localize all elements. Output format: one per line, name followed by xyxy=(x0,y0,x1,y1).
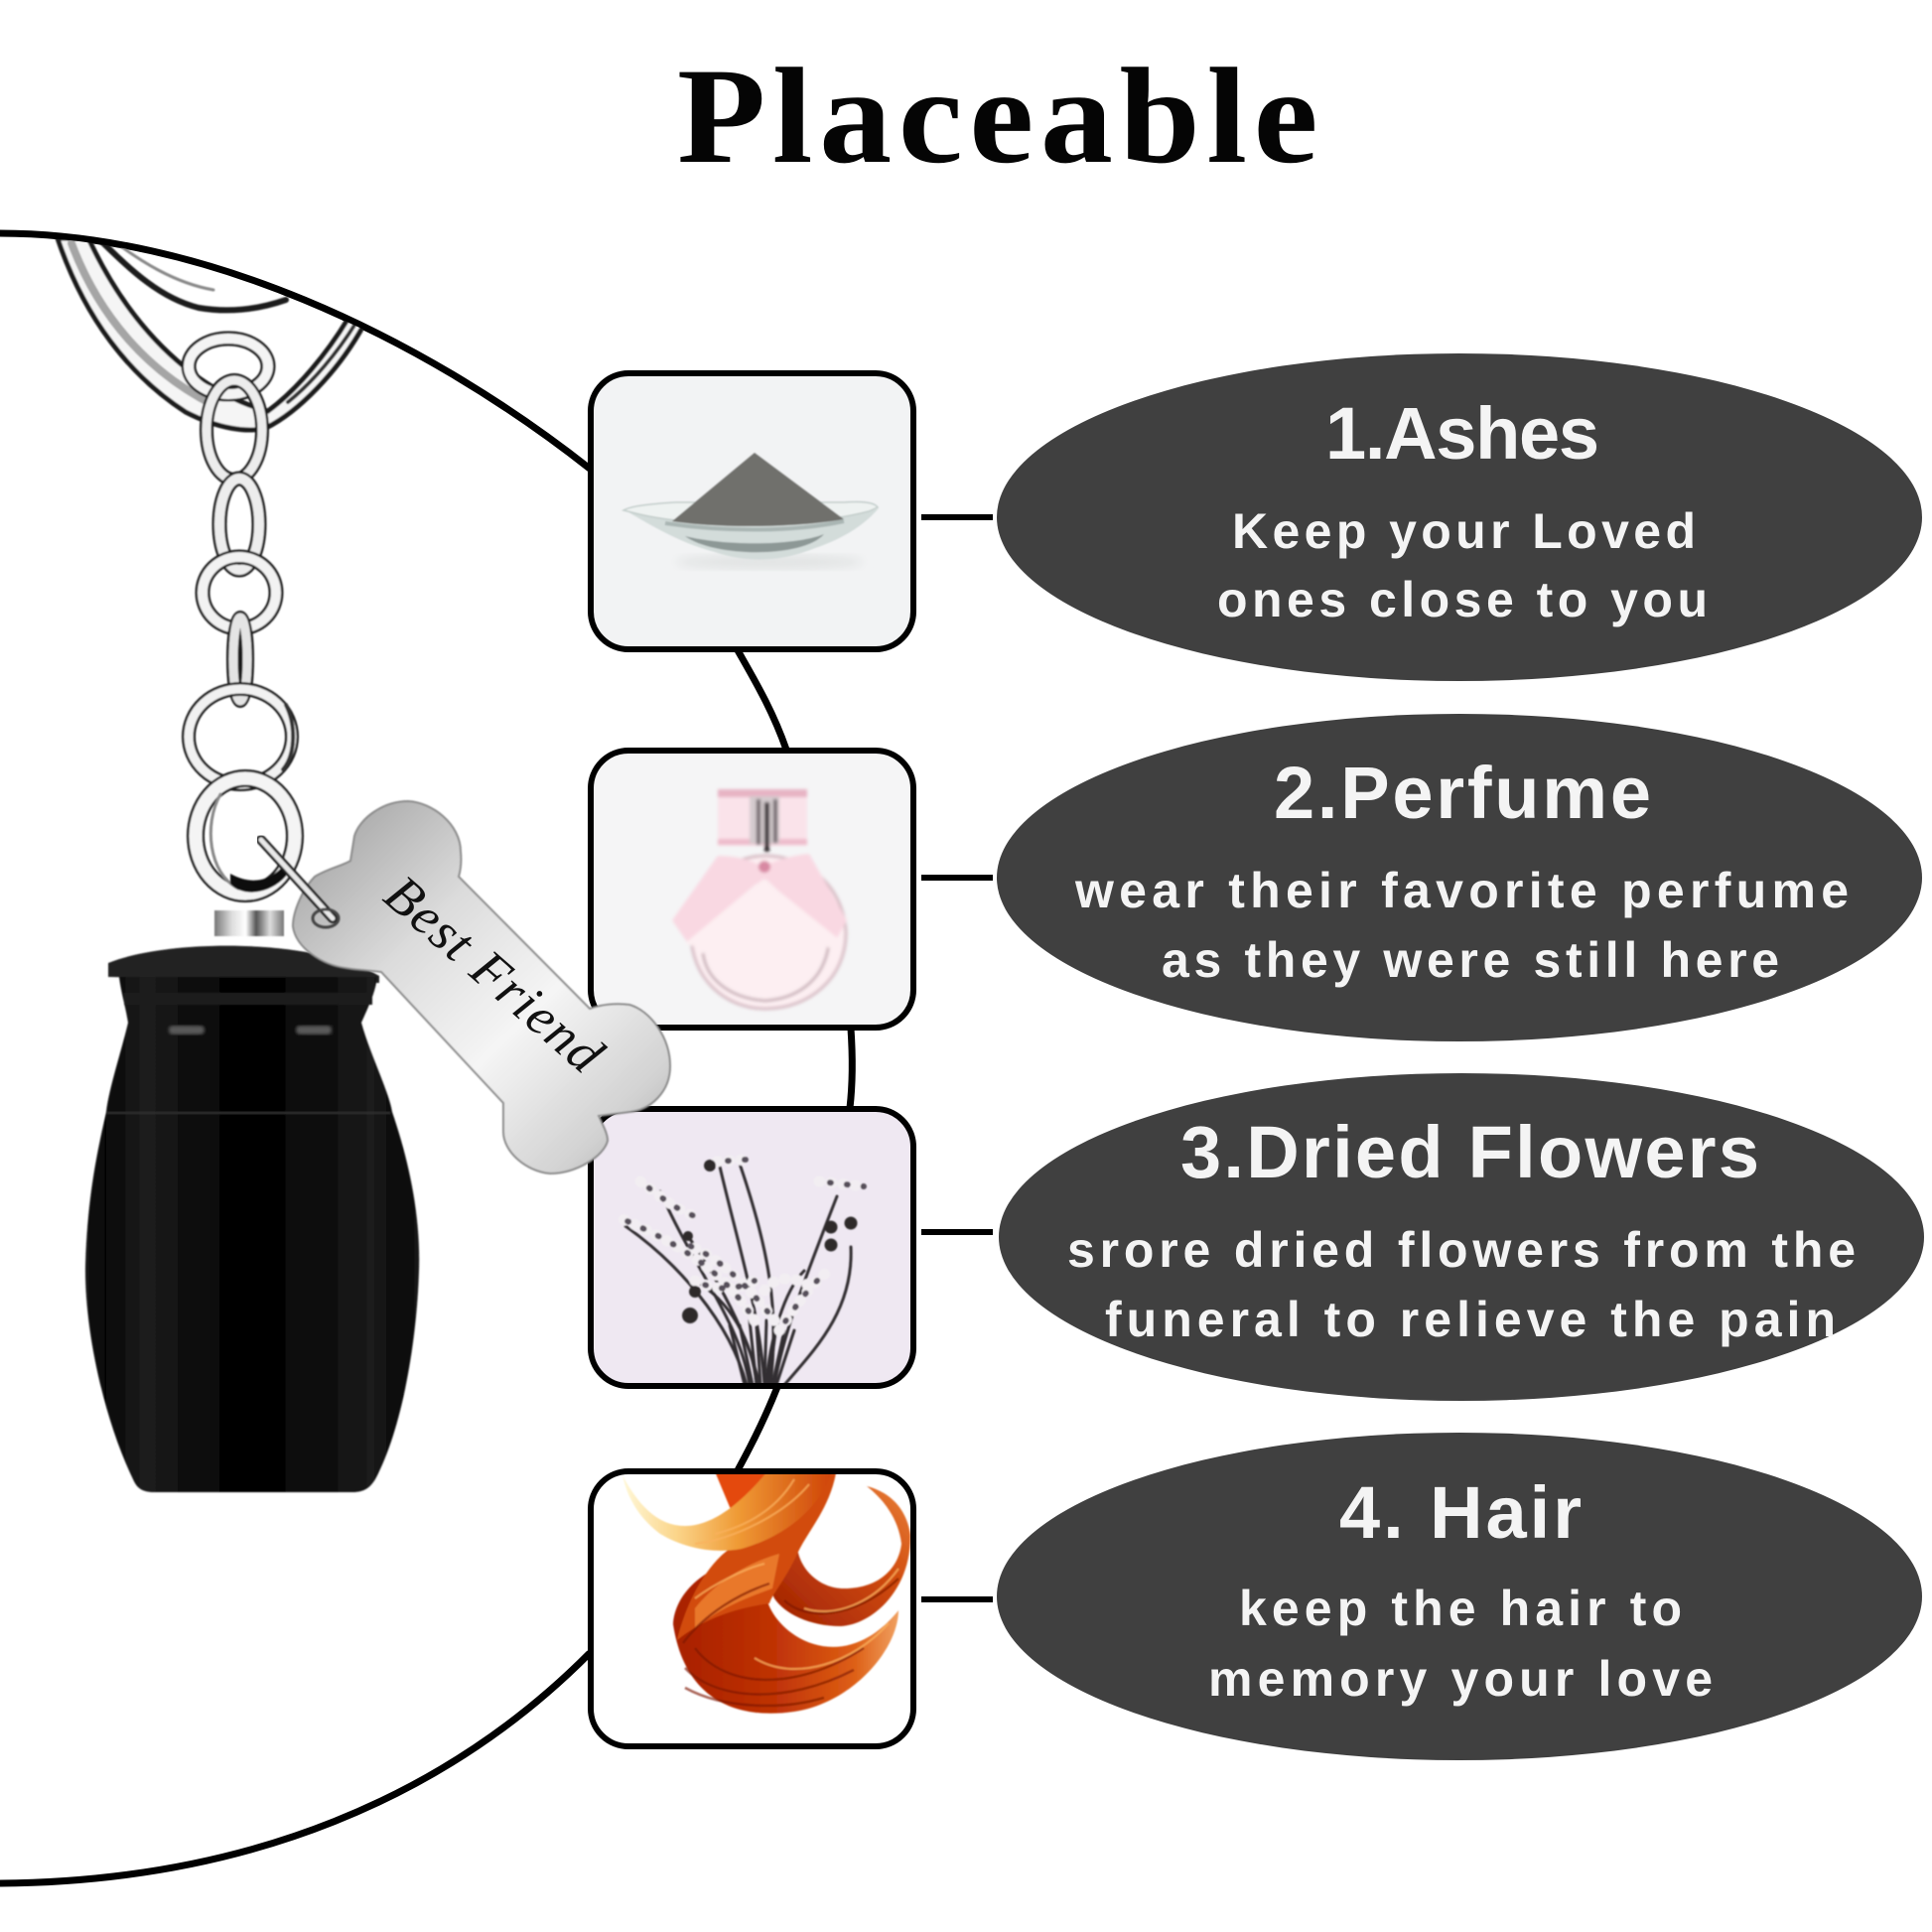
keychain clasp and chain xyxy=(58,238,363,894)
panel: dried flowers image xyxy=(591,1109,913,1386)
title: Placeable xyxy=(677,40,1318,192)
text: hair description line 2: memory your love xyxy=(1208,1651,1713,1707)
text: dried flowers description: srore dried flowers from the xyxy=(1067,1222,1856,1278)
heading: hair: 4. Hair xyxy=(1339,1471,1582,1554)
oval: ashes xyxy=(997,353,1922,681)
connector lines from boxes to ovals xyxy=(921,517,993,1599)
text: hair description: keep the hair to xyxy=(1239,1581,1682,1636)
oval: dried flowers xyxy=(999,1073,1924,1401)
heading: perfume: 2.Perfume xyxy=(1274,752,1651,834)
panel: perfume image xyxy=(591,751,913,1028)
tag engraving: Best Friend xyxy=(373,864,616,1085)
icon: dried flower bouquet xyxy=(616,1160,864,1385)
icon: pink perfume bottle xyxy=(672,789,847,1009)
panel: hair image xyxy=(591,1471,913,1746)
text: perfume description: wear their favorite perfume xyxy=(1074,863,1849,918)
icon: red-orange hair curls xyxy=(622,1471,910,1714)
heading: dried flowers: 3.Dried Flowers xyxy=(1180,1111,1759,1193)
text: dried flowers description line 2: funeral to relieve the pain xyxy=(1105,1292,1836,1347)
oval: perfume xyxy=(997,714,1922,1041)
oval: hair xyxy=(997,1433,1922,1760)
bone tag xyxy=(261,801,670,1173)
large circle outline segments xyxy=(0,233,852,1883)
tag wire ring xyxy=(261,840,339,927)
black urn xyxy=(85,910,419,1492)
text: ashes description line 2: ones close to you xyxy=(1217,572,1708,627)
panel: ashes image xyxy=(591,373,913,649)
text: perfume description line 2: as they were still here xyxy=(1162,932,1779,988)
text: ashes description: Keep your Loved xyxy=(1232,503,1696,559)
heading: ashes: 1.Ashes xyxy=(1325,392,1599,475)
icon: ash pile on glass dish xyxy=(623,453,879,570)
